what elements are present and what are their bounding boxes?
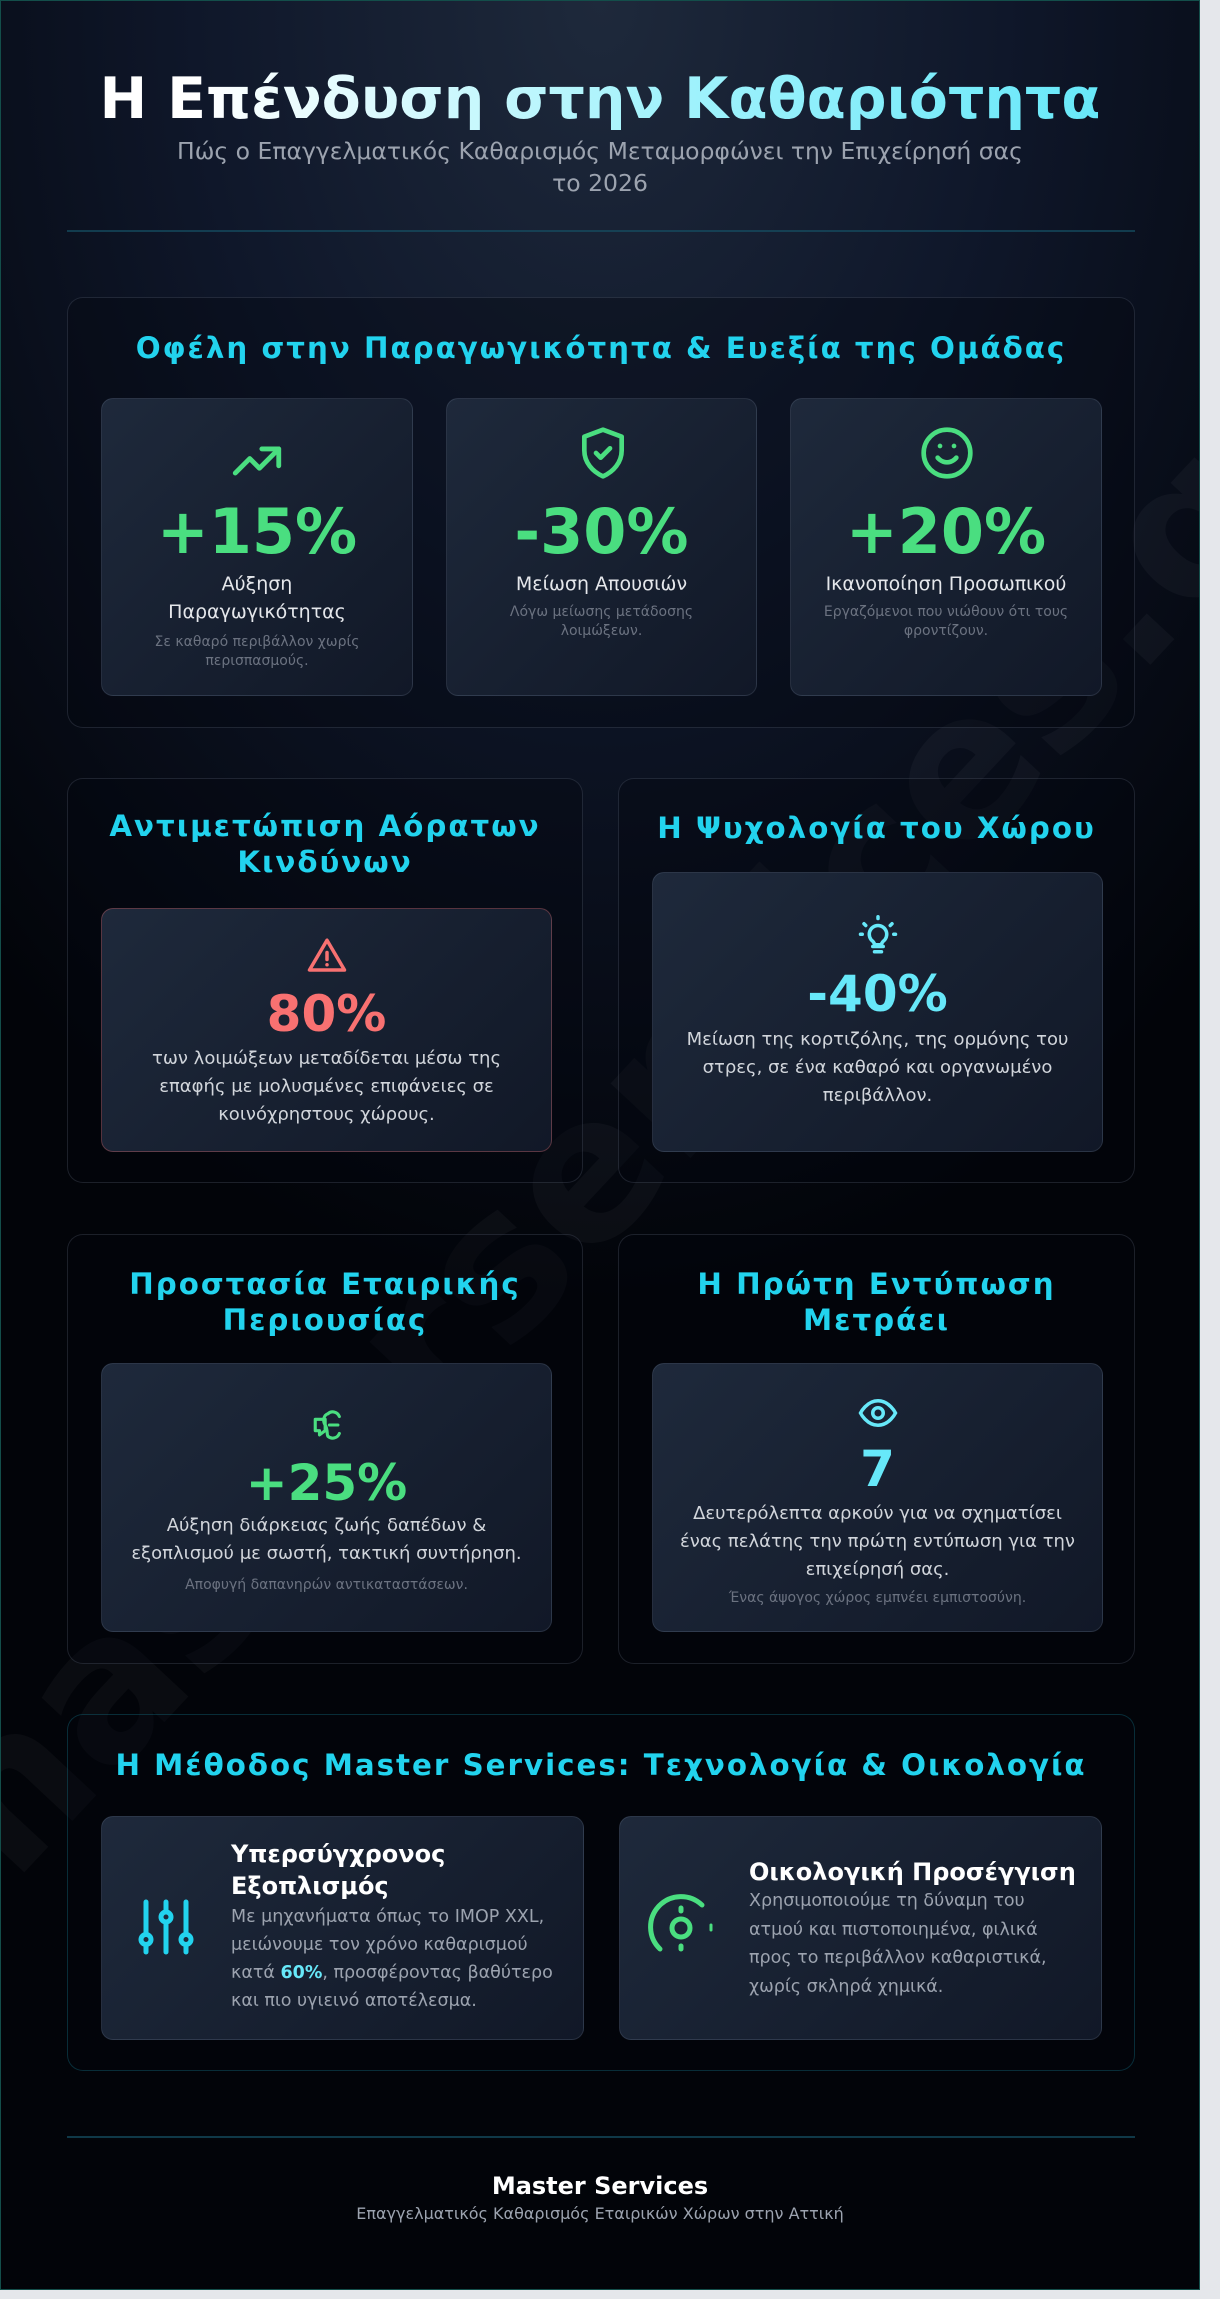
icon: sliders bbox=[138, 1900, 194, 1954]
card: 80%: 80% bbox=[267, 985, 386, 1043]
card: eco: ατμού και πιστοποιημένα, φιλικά bbox=[749, 1920, 1038, 1940]
card: +15% bbox=[101, 398, 413, 696]
card: 80% bbox=[101, 908, 552, 1152]
card: 7 seconds: Δευτερόλεπτα αρκούν για να σχηματίσει bbox=[693, 1503, 1062, 1524]
card: eco: προς το περιβάλλον καθαριστικά, bbox=[749, 1948, 1047, 1968]
panel: first impression bbox=[618, 1234, 1135, 1664]
panel: psychology bbox=[618, 778, 1135, 1183]
card: equipment: Εξοπλισμός bbox=[231, 1872, 389, 1900]
card: +15%: περισπασμούς. bbox=[205, 653, 309, 669]
card: +25% bbox=[101, 1363, 552, 1632]
subtitle: Πώς ο Επαγγελματικός Καθαρισμός Μεταμορφώνει την Επιχείρησή σας bbox=[177, 137, 1023, 165]
card: +15%: Σε καθαρό περιβάλλον χωρίς bbox=[155, 634, 359, 650]
panel: productivity bbox=[67, 297, 1135, 728]
icon: euro bbox=[314, 1410, 341, 1440]
card: equipment: και πιο υγιεινό αποτέλεσμα. bbox=[231, 1991, 477, 2011]
heading: Προστασία Εταιρικής bbox=[129, 1267, 521, 1301]
card: equipment bbox=[101, 1816, 584, 2040]
heading: Η Πρώτη Εντύπωση bbox=[697, 1267, 1056, 1301]
panel: invisible dangers bbox=[67, 778, 583, 1183]
card: -30%: -30% bbox=[514, 495, 689, 568]
subtitle bbox=[177, 137, 1023, 197]
panel: asset protection bbox=[67, 1234, 583, 1664]
card: +25%: +25% bbox=[246, 1454, 407, 1512]
card: +20% bbox=[790, 398, 1102, 696]
card: equipment: Με μηχανήματα όπως το IMOP XXL, bbox=[231, 1907, 544, 1927]
card: eco: Χρησιμοποιούμε τη δύναμη του bbox=[749, 1891, 1025, 1911]
card: -40%: -40% bbox=[807, 965, 948, 1023]
panel: method bbox=[67, 1714, 1135, 2071]
icon: bulb bbox=[858, 915, 898, 954]
card: 80%: κοινόχρηστους χώρους. bbox=[218, 1104, 435, 1125]
heading: Κινδύνων bbox=[237, 845, 413, 879]
heading: Αντιμετώπιση Αόρατων bbox=[109, 809, 541, 843]
card: 80%: επαφής με μολυσμένες επιφάνειες σε bbox=[159, 1076, 494, 1097]
heading bbox=[697, 1267, 1056, 1337]
card: equipment: Υπερσύγχρονος bbox=[231, 1840, 445, 1868]
card: +15%: Παραγωγικότητας bbox=[168, 601, 346, 623]
card: eco: χωρίς σκληρά χημικά. bbox=[749, 1976, 943, 1996]
heading: Μετράει bbox=[803, 1303, 950, 1337]
card: eco: Οικολογική Προσέγγιση bbox=[749, 1858, 1076, 1886]
card: 7 seconds: επιχείρησή σας. bbox=[806, 1559, 949, 1580]
title: Η Επένδυση στην Καθαριότητα bbox=[100, 66, 1100, 132]
card: +20%: Εργαζόμενοι που νιώθουν ότι τους bbox=[824, 604, 1068, 620]
heading: Η Ψυχολογία του Χώρου bbox=[657, 811, 1096, 845]
heading: Η Μέθοδος Master Services: Τεχνολογία & Οικολογία bbox=[115, 1748, 1087, 1782]
icon: smile bbox=[921, 427, 973, 479]
card: 7 seconds bbox=[652, 1363, 1103, 1632]
card: eco bbox=[619, 1816, 1102, 2040]
footer: Master Services bbox=[492, 2172, 708, 2200]
card: -40%: περιβάλλον. bbox=[823, 1085, 932, 1106]
card: 7 seconds: ένας πελάτης την πρώτη εντύπωση για την bbox=[680, 1531, 1075, 1552]
heading bbox=[109, 809, 541, 879]
footer bbox=[356, 2172, 844, 2223]
icon: eco gauge bbox=[648, 1894, 712, 1952]
card: equipment: κατά 60%, προσφέροντας βαθύτερο bbox=[231, 1963, 553, 1983]
card: 7 seconds: 7 bbox=[860, 1440, 895, 1498]
card: 80%: των λοιμώξεων μεταδίδεται μέσω της bbox=[152, 1048, 501, 1069]
card: -40% bbox=[652, 872, 1103, 1152]
card: 7 seconds: Ένας άψογος χώρος εμπνέει εμπιστοσύνη. bbox=[729, 1590, 1026, 1606]
card: +15%: +15% bbox=[157, 495, 357, 568]
card: +15%: Αύξηση bbox=[222, 573, 292, 595]
card: +20%: φροντίζουν. bbox=[904, 623, 988, 639]
heading: Περιουσίας bbox=[223, 1303, 427, 1337]
card: -30% bbox=[446, 398, 757, 696]
card: +25%: εξοπλισμού με σωστή, τακτική συντήρηση. bbox=[131, 1543, 522, 1564]
card: +25%: Αποφυγή δαπανηρών αντικαταστάσεων. bbox=[185, 1577, 468, 1593]
card: -30%: Μείωση Απουσιών bbox=[516, 573, 687, 595]
card: equipment: μειώνουμε τον χρόνο καθαρισμού bbox=[231, 1935, 528, 1955]
icon: shield bbox=[582, 427, 624, 479]
card: +25%: Αύξηση διάρκειας ζωής δαπέδων & bbox=[167, 1515, 486, 1536]
card: -30%: Λόγω μείωσης μετάδοσης bbox=[510, 604, 693, 620]
heading bbox=[129, 1267, 521, 1337]
icon: trend up bbox=[232, 446, 282, 476]
icon: eye bbox=[858, 1399, 898, 1427]
subtitle: το 2026 bbox=[552, 169, 648, 197]
footer: Επαγγελματικός Καθαρισμός Εταιρικών Χώρων στην Αττική bbox=[356, 2204, 844, 2223]
card: +20%: Ικανοποίηση Προσωπικού bbox=[826, 573, 1066, 595]
card: -40%: Μείωση της κορτιζόλης, της ορμόνης του bbox=[687, 1029, 1068, 1050]
heading: productivity: Οφέλη στην Παραγωγικότητα & Ευεξία της Ομάδας bbox=[136, 331, 1066, 365]
card: -30%: λοιμώξεων. bbox=[561, 623, 642, 639]
icon: warning bbox=[308, 938, 346, 972]
card: -40%: στρες, σε ένα καθαρό και οργανωμένο bbox=[703, 1057, 1052, 1078]
card: +20%: +20% bbox=[846, 495, 1046, 568]
